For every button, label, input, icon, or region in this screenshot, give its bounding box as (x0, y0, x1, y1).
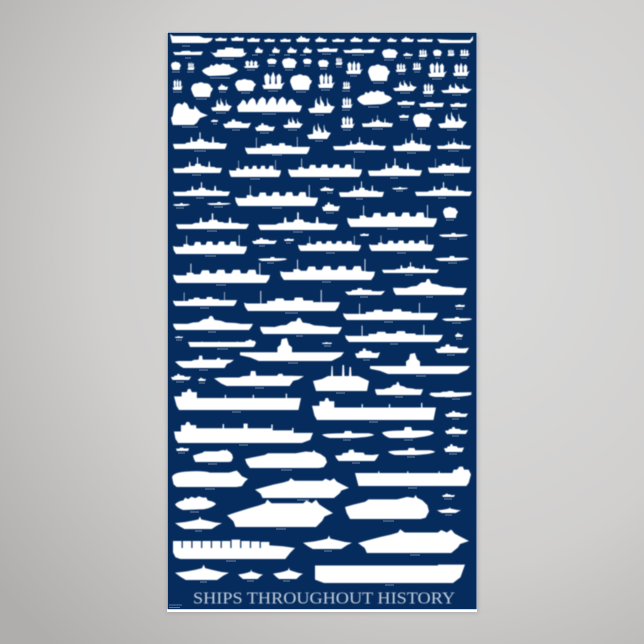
row 23: superyachts and largest vessel (175, 565, 465, 583)
row 20: modern cruise ships and ultra carrier (172, 467, 471, 498)
row 13: second world war vessels (173, 279, 472, 321)
poster shadow (167, 34, 478, 613)
ship: ancient barge (170, 34, 213, 43)
row 5: clippers and early steamships (171, 90, 467, 125)
row 22: container ship and mega cruise ship (173, 529, 469, 559)
row 15: aircraft carriers and passenger ships (175, 338, 470, 374)
faint ship captions (172, 46, 467, 585)
row 19: ferries and cruise ships (176, 444, 464, 468)
row 3: sailing ships (171, 57, 470, 81)
row 17: supertankers (174, 389, 472, 420)
row 11: interwar liners (173, 233, 468, 254)
row 18: replenishment ship and submarines (174, 422, 468, 443)
row 6: nineteenth century vessels (211, 112, 467, 139)
row 4: galleons and ships of the line (173, 72, 472, 97)
row 16: carriers and research ship (171, 365, 472, 395)
row 2: ancient and medieval ships (173, 47, 470, 58)
credit block (169, 605, 182, 608)
poster panel (167, 32, 477, 612)
row 9: dreadnoughts and ocean liners (173, 181, 472, 211)
title: SHIPS THROUGHOUT HISTORY (193, 588, 455, 608)
row 14: battleships and postwar liners (173, 316, 463, 342)
ship silhouettes fleet (170, 34, 473, 583)
ship: research vessel with tall masts (313, 365, 369, 391)
row 8: pre-dreadnoughts and four-funnel liners (173, 157, 471, 177)
row 1: oldest vessels (170, 34, 473, 43)
row 12: submarines and giant liners (173, 256, 469, 283)
row 21: yachts and large cruise ships (175, 495, 461, 529)
ship: long ancient galley (437, 36, 473, 43)
row 7: early liners and cruisers (173, 132, 471, 154)
row 10: battleships and large liners (176, 205, 458, 230)
